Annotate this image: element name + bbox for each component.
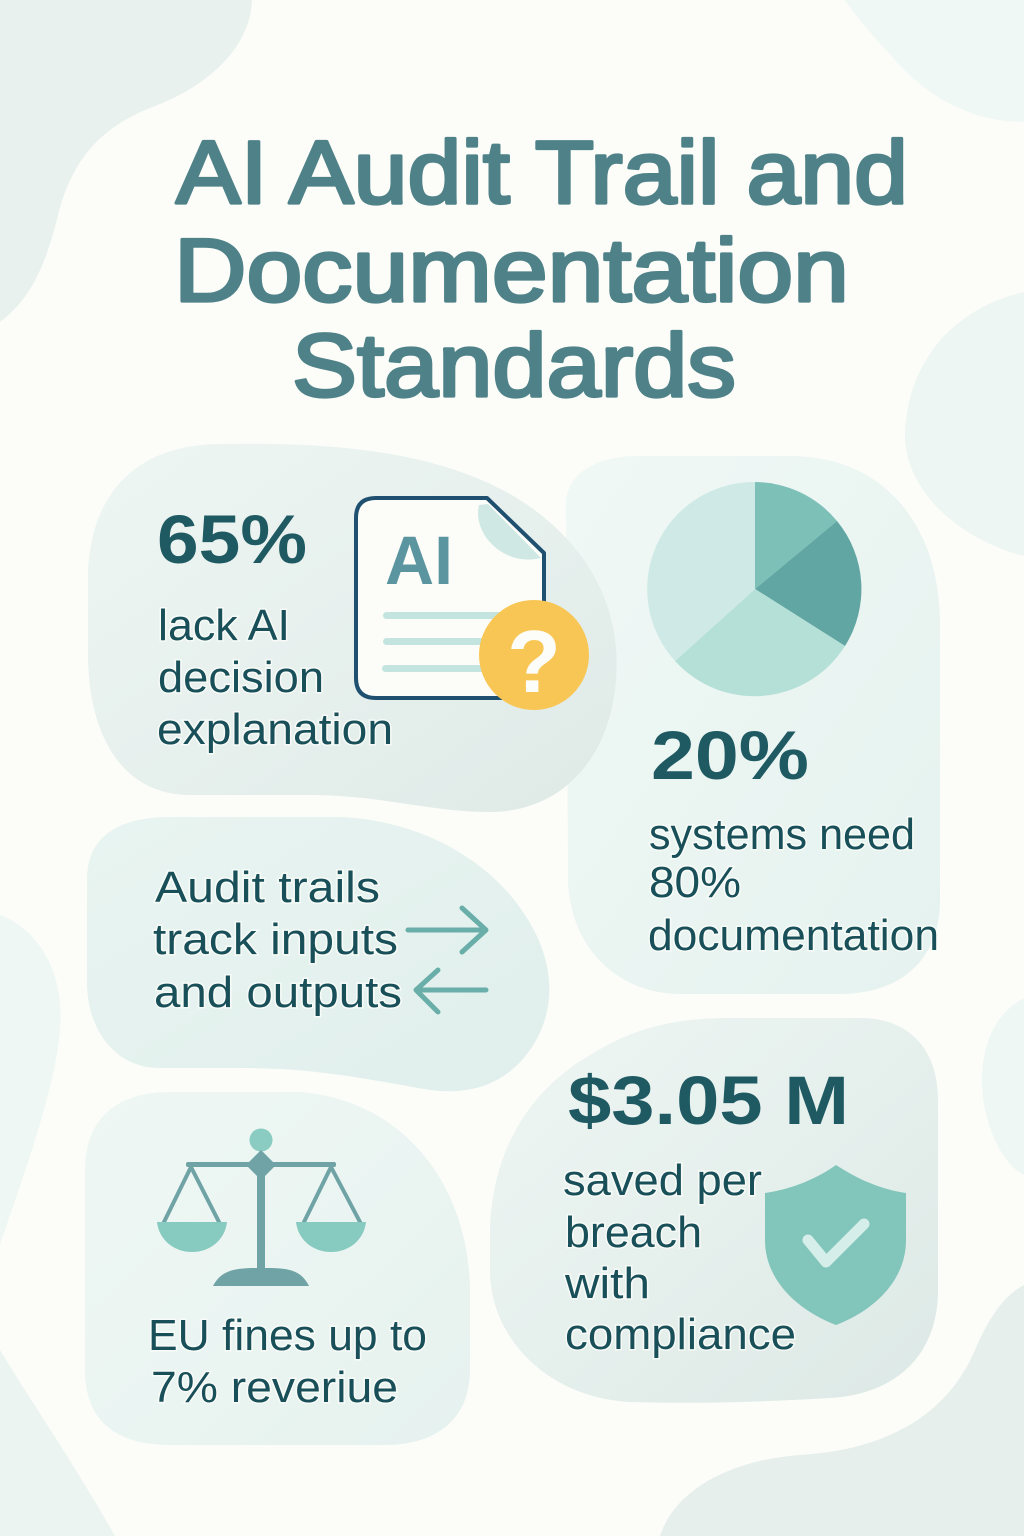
- icon: AI document with question mark: AI: [385, 522, 453, 599]
- icon: arrow right: [408, 908, 486, 952]
- stat label: 80%: [649, 858, 741, 907]
- text: audit trails track inputs and outputs: and outputs: [154, 968, 402, 1017]
- text: audit trails track inputs and outputs: track inputs: [153, 915, 398, 964]
- icon: AI document with question mark: ?: [507, 612, 561, 711]
- panel: $3.05 M saved: [490, 1018, 938, 1403]
- stat label: breach: [565, 1208, 702, 1257]
- stat label: with: [564, 1259, 650, 1308]
- stat label: explanation: [157, 705, 393, 754]
- panel: 20% systems need 80% documentation: [566, 456, 940, 994]
- panel: audit trails: [87, 817, 549, 1091]
- text: audit trails track inputs and outputs: Audit trails: [155, 863, 380, 912]
- text: EU fines up to 7% reveriue: 7% reveriue: [151, 1363, 398, 1412]
- icon: shield check: [765, 1165, 906, 1325]
- icon: AI document with question mark: [356, 498, 589, 711]
- stat label: decision: [158, 653, 324, 702]
- title: AI Audit Trail and: [176, 122, 908, 222]
- stat: 65%: 65%: [157, 501, 307, 578]
- stat label: lack AI: [158, 601, 290, 650]
- text: EU fines up to 7% reveriue: [148, 1311, 427, 1412]
- panel: 65% lack AI decision explanation: [88, 444, 617, 812]
- pie chart: [647, 482, 861, 696]
- stat label: saved per: [563, 1156, 762, 1205]
- stat: $3.05 M: $3.05 M: [568, 1062, 849, 1139]
- title: [174, 122, 908, 415]
- stat label: [157, 601, 393, 754]
- stat label: [648, 810, 939, 960]
- stat: 20%: 20%: [651, 717, 809, 794]
- title: Standards: [292, 315, 736, 415]
- text: audit trails track inputs and outputs: [153, 863, 402, 1017]
- stat label: [563, 1156, 796, 1359]
- title: Documentation: [174, 220, 849, 320]
- stat label: systems need: [649, 810, 915, 859]
- panel: EU fines: [85, 1092, 470, 1445]
- icon: arrow left: [416, 970, 486, 1012]
- text: EU fines up to 7% reveriue: EU fines up to: [148, 1311, 427, 1360]
- icon: scales of justice: [157, 1128, 366, 1286]
- stat label: documentation: [648, 911, 939, 960]
- stat label: compliance: [565, 1310, 796, 1359]
